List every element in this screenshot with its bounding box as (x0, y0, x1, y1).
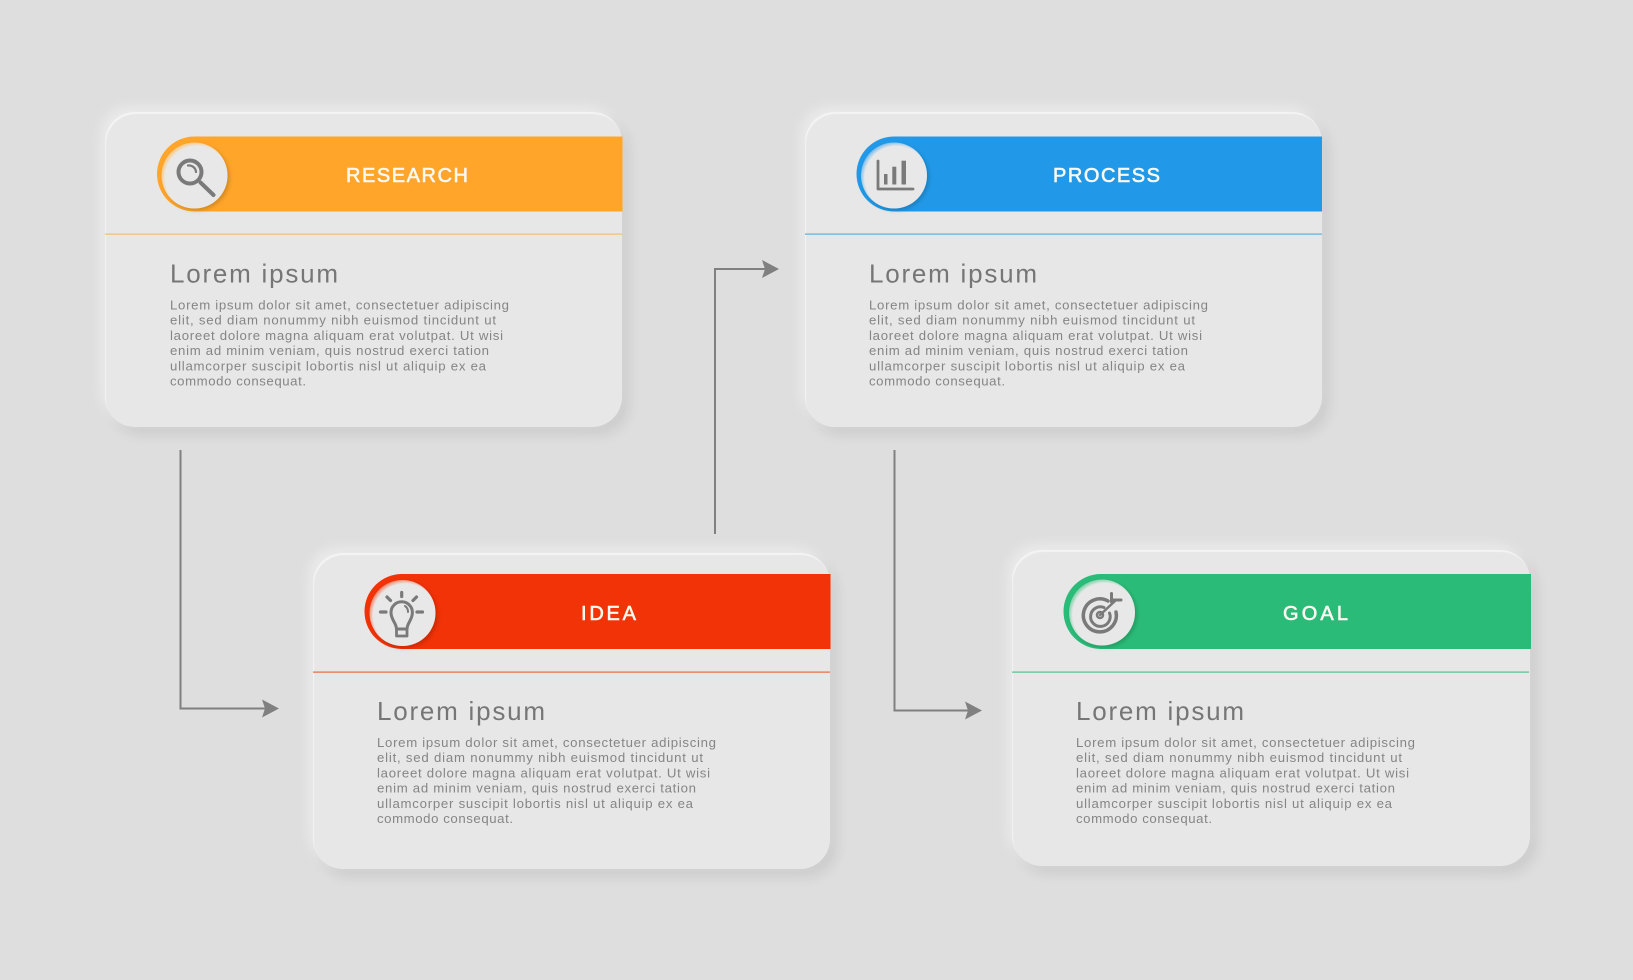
body text: goal: ullamcorper suscipit lobortis nisl ut aliquip ex ea (1076, 796, 1393, 811)
heading: idea: IDEA (581, 603, 637, 625)
body text: process: elit, sed diam nonummy nibh euismod tincidunt ut (869, 313, 1195, 328)
icon circle: goal (1069, 580, 1135, 646)
subheading: goal: Lorem ipsum (1076, 696, 1244, 726)
body text: idea: elit, sed diam nonummy nibh euismod tincidunt ut (377, 750, 703, 765)
body text: idea: commodo consequat. (377, 811, 513, 826)
header bar: goal (1064, 574, 1531, 649)
panel: goal (1012, 550, 1530, 866)
body text: goal: laoreet dolore magna aliquam erat volutpat. Ut wisi (1076, 765, 1409, 780)
body text: process: ullamcorper suscipit lobortis nisl ut aliquip ex ea (869, 358, 1186, 373)
header bar: process (856, 136, 1322, 212)
body text: research: Lorem ipsum dolor sit amet, consectetuer adipiscing (170, 298, 509, 312)
body text: goal: enim ad minim veniam, quis nostrud exerci tation (1076, 781, 1395, 796)
body text: research (170, 298, 509, 388)
heading: process: PROCESS (1053, 165, 1160, 187)
subheading: process: Lorem ipsum (869, 258, 1037, 288)
body text: research: elit, sed diam nonummy nibh euismod tincidunt ut (170, 313, 496, 328)
icon: target (1083, 594, 1121, 632)
body text: research: ullamcorper suscipit lobortis nisl ut aliquip ex ea (170, 358, 487, 373)
panel: process (805, 112, 1322, 427)
body text: process: enim ad minim veniam, quis nostrud exerci tation (869, 343, 1188, 358)
body text: process: laoreet dolore magna aliquam erat volutpat. Ut wisi (869, 328, 1202, 343)
subheading: research: Lorem ipsum (170, 258, 338, 288)
arrow: process to goal (894, 450, 982, 720)
icon circle: research (162, 142, 228, 208)
icon circle: process (861, 142, 927, 208)
body text: research: commodo consequat. (170, 374, 306, 388)
icon: magnifying glass (178, 160, 214, 195)
header bar: idea (364, 574, 830, 649)
subheading: idea: Lorem ipsum (377, 696, 545, 726)
heading: research: RESEARCH (346, 165, 468, 187)
body text: goal: elit, sed diam nonummy nibh euismod tincidunt ut (1076, 750, 1402, 765)
body text: idea: ullamcorper suscipit lobortis nisl ut aliquip ex ea (377, 796, 694, 811)
panel: research (105, 112, 622, 427)
divider: research (105, 234, 622, 235)
body text: goal (1076, 735, 1415, 826)
panel: idea (313, 553, 830, 869)
body text: idea: laoreet dolore magna aliquam erat volutpat. Ut wisi (377, 765, 710, 780)
body text: idea (377, 735, 716, 826)
arrow: idea to process (715, 260, 779, 534)
heading: goal: GOAL (1283, 603, 1348, 625)
body text: goal: Lorem ipsum dolor sit amet, consectetuer adipiscing (1076, 735, 1415, 750)
body text: process (869, 298, 1208, 388)
icon: bar chart (878, 161, 913, 189)
body text: process: Lorem ipsum dolor sit amet, consectetuer adipiscing (869, 298, 1208, 312)
body text: research: laoreet dolore magna aliquam erat volutpat. Ut wisi (170, 328, 503, 343)
body text: research: enim ad minim veniam, quis nostrud exerci tation (170, 343, 489, 358)
body text: process: commodo consequat. (869, 374, 1005, 388)
body text: idea: enim ad minim veniam, quis nostrud exerci tation (377, 781, 696, 796)
icon: light bulb (380, 592, 422, 636)
body text: goal: commodo consequat. (1076, 811, 1212, 826)
arrow: research to idea (180, 450, 279, 718)
body text: idea: Lorem ipsum dolor sit amet, consectetuer adipiscing (377, 735, 716, 750)
divider: process (805, 234, 1322, 235)
divider: idea (313, 672, 830, 673)
header bar: research (157, 136, 623, 212)
divider: goal (1012, 672, 1529, 673)
icon circle: idea (370, 580, 436, 646)
